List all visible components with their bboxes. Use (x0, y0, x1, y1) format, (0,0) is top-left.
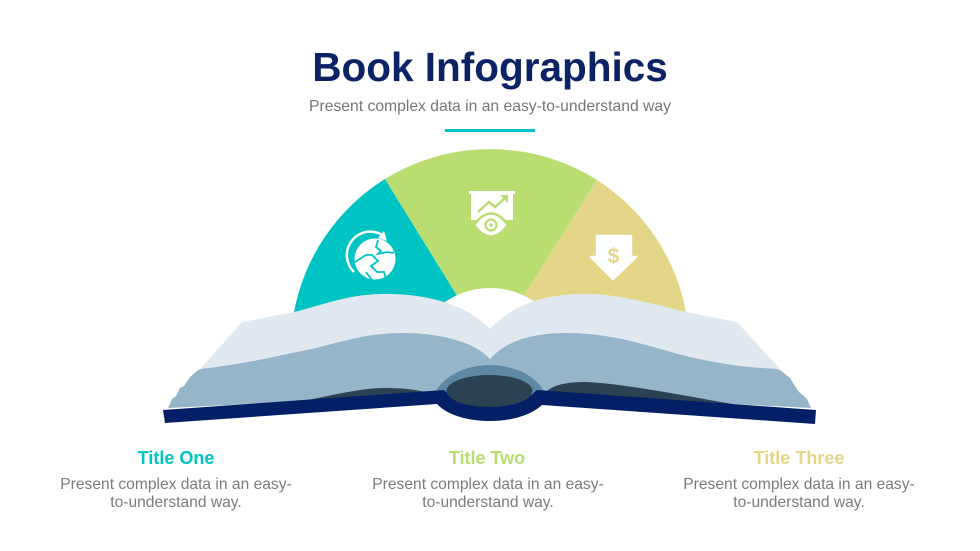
icon: chart with eye (469, 191, 515, 236)
book: right lower pages (490, 310, 811, 408)
column 3 text: to-understand way. (733, 494, 865, 511)
fan segment: gold (490, 180, 686, 349)
column 2 text: Present complex data in an easy- (372, 476, 604, 493)
icon: dollar down arrow (591, 236, 636, 279)
column 3 text: Present complex data in an easy- (683, 476, 915, 493)
white centre circle (410, 288, 570, 448)
column 1 (60, 448, 292, 511)
accent underline (445, 129, 535, 132)
book: left top pages (200, 294, 490, 369)
column 2 text: to-understand way. (422, 494, 554, 511)
column 3 heading: Title Three (754, 448, 844, 468)
subtitle: Present complex data in an easy-to-understand way (309, 98, 671, 115)
column 3 (683, 448, 915, 511)
column 2 text (372, 476, 604, 511)
book: left dark inner page (293, 388, 432, 403)
column 1 text (60, 476, 292, 511)
column 2 (372, 448, 604, 511)
column 1 heading: Title One (138, 448, 214, 468)
book: navy cover (163, 390, 816, 424)
book: right top pages (490, 294, 780, 369)
fan segment: green (385, 149, 597, 349)
icon: dollar down arrow: $ (608, 245, 620, 268)
book: dark spine ellipse (446, 375, 532, 407)
column 1 text: Present complex data in an easy- (60, 476, 292, 493)
book: right dark inner page (547, 382, 738, 405)
title: Book Infographics (312, 44, 668, 90)
icon: globe with arrow (347, 231, 396, 280)
book: blue spine arch (435, 365, 545, 393)
column 2 heading: Title Two (449, 448, 525, 468)
book: left lower pages (168, 310, 490, 408)
column 3 text (683, 476, 915, 511)
fan segment: teal (294, 179, 490, 349)
column 1 text: to-understand way. (110, 494, 242, 511)
